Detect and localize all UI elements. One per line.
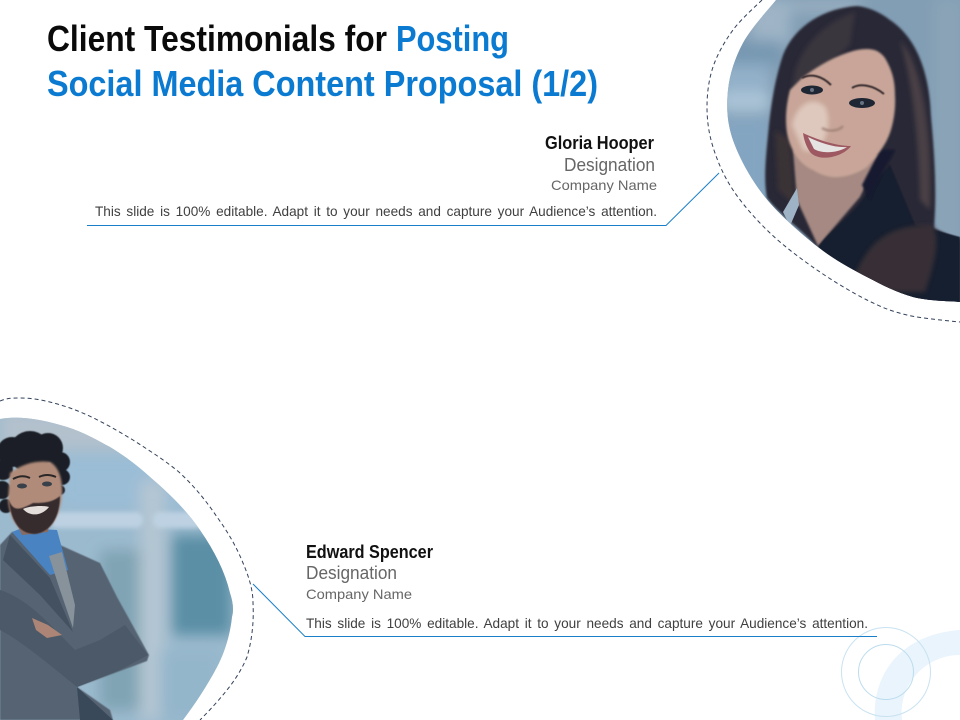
- connector line: [87, 173, 719, 226]
- decorative circles: [842, 628, 960, 720]
- face: [8, 461, 62, 533]
- testimonial: Edward Spencer: This slide is 100% editable. Adapt it to your needs and capture your Audience’s attention.: [306, 615, 868, 631]
- neck and collar: [793, 150, 880, 246]
- testimonial: Edward Spencer: Company Name: [306, 586, 412, 602]
- lapels: [3, 535, 73, 632]
- blue photo tint: [2, 418, 198, 718]
- hair: [0, 431, 70, 513]
- title: [47, 18, 598, 104]
- testimonial: Gloria Hooper: [87, 133, 719, 226]
- photo: man: [0, 410, 240, 720]
- photo: woman: [720, 0, 960, 320]
- suit: [0, 532, 149, 720]
- eyes and brows: [802, 76, 831, 85]
- testimonial: Gloria Hooper: Company Name: [551, 177, 657, 193]
- tie: [49, 552, 75, 628]
- eyes: [17, 484, 27, 488]
- hair: [765, 6, 960, 310]
- testimonial: Gloria Hooper: This slide is 100% editable. Adapt it to your needs and capture your Audience’s attention.: [95, 203, 657, 219]
- neck: [18, 526, 48, 535]
- jacket: [818, 165, 960, 310]
- shirt: [12, 528, 68, 575]
- face: [786, 49, 895, 177]
- connector line: [253, 584, 877, 636]
- title: Posting: [396, 18, 509, 59]
- testimonial: Edward Spencer: [253, 542, 877, 636]
- title: Social Media Content Proposal (1/2): [47, 63, 598, 104]
- dashed ring: man: [0, 398, 253, 720]
- title: Client Testimonials for: [47, 18, 387, 59]
- testimonial: Edward Spencer: Edward Spencer: [306, 542, 433, 562]
- smile: [803, 133, 851, 158]
- dashed ring: woman: [707, 0, 960, 322]
- beard: [9, 496, 60, 534]
- hand: [32, 618, 62, 638]
- testimonial: Edward Spencer: Designation: [306, 563, 397, 583]
- testimonial: Gloria Hooper: Gloria Hooper: [545, 133, 654, 153]
- blue photo tint: [728, 0, 960, 244]
- testimonial: Gloria Hooper: Designation: [564, 155, 655, 175]
